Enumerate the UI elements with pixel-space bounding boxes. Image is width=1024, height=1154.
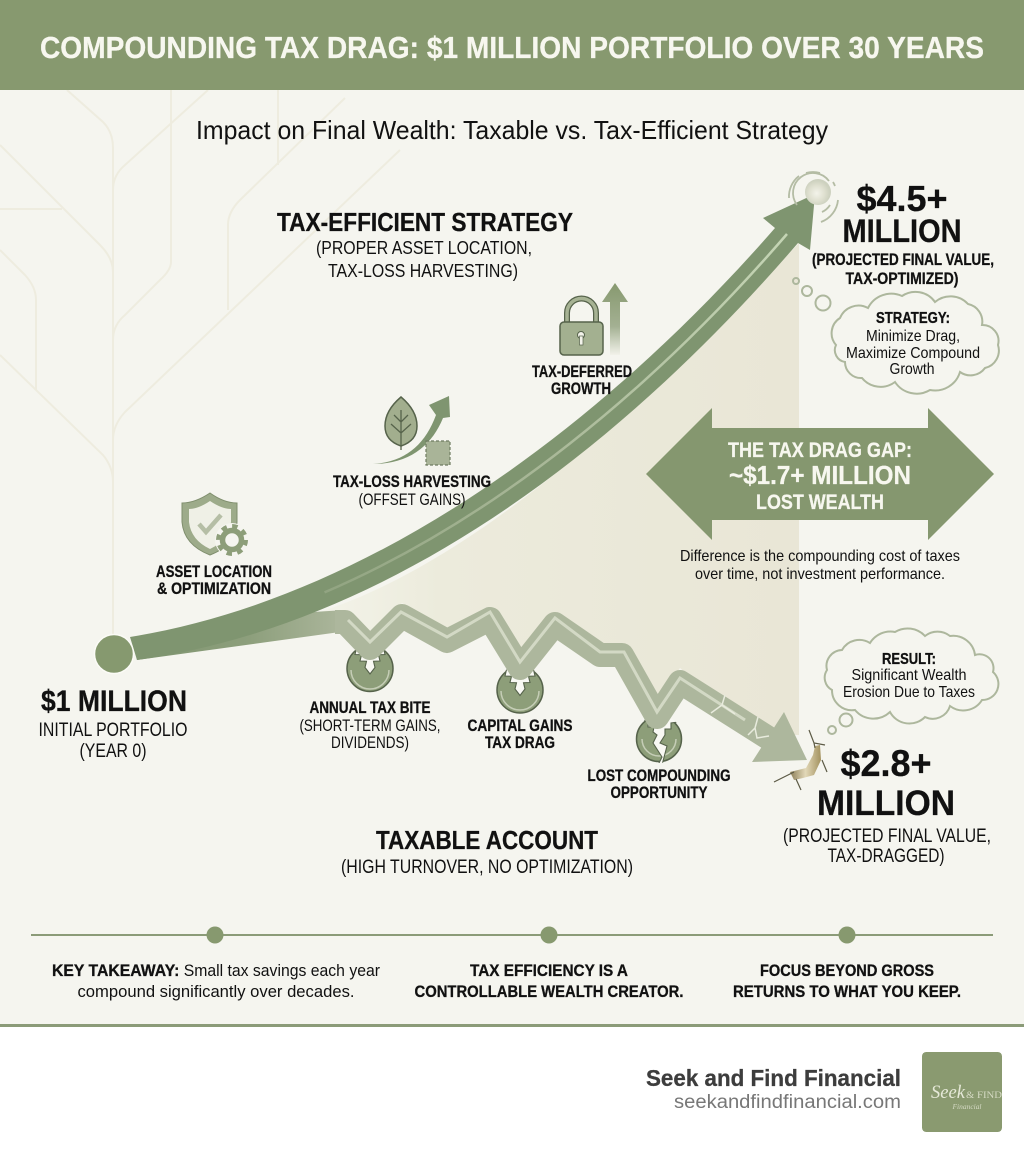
logo: Financial: [951, 1103, 982, 1111]
callout: strategy thought cloud: [793, 278, 999, 394]
icon: lock with up arrow: [560, 283, 628, 355]
final value: tax-dragged: [783, 743, 991, 867]
icon: broken coin: [636, 720, 682, 763]
takeaway 2: [414, 962, 684, 1001]
callout: result thought cloud: Erosion Due to Taxes: [843, 684, 975, 701]
header banner: [0, 0, 1024, 90]
icon: annual tax bite: [346, 650, 394, 692]
strategy heading: (PROPER ASSET LOCATION,: [316, 238, 532, 258]
logo: Seek: [931, 1082, 966, 1103]
starting value: $1 MILLION: [41, 685, 187, 718]
gap explanation: [680, 548, 960, 583]
taxable account heading: [341, 825, 633, 878]
gap explanation: Difference is the compounding cost of taxes: [680, 548, 960, 565]
label: asset location: ASSET LOCATION: [156, 563, 272, 581]
starting value: [38, 685, 188, 762]
icon: leaf with arrow and dashed square: [373, 396, 450, 465]
callout: strategy thought cloud: Maximize Compound: [846, 345, 980, 362]
double arrow: tax drag gap: LOST WEALTH: [756, 491, 884, 514]
icon: target glow at arrow tip: [789, 172, 838, 222]
strategy heading: TAX-LOSS HARVESTING): [328, 261, 518, 281]
strategy heading: [277, 207, 573, 281]
label: lost compounding: OPPORTUNITY: [610, 784, 708, 802]
starting value: (YEAR 0): [80, 741, 146, 762]
label: annual tax bite: [300, 699, 440, 752]
final value: tax-optimized: $4.5+: [856, 178, 948, 219]
final value: tax-optimized: TAX-OPTIMIZED): [846, 269, 958, 288]
label: capital gains: TAX DRAG: [485, 734, 555, 752]
taxable account heading: TAXABLE ACCOUNT: [376, 825, 598, 855]
double arrow: tax drag gap: THE TAX DRAG GAP:: [728, 439, 912, 462]
final value: tax-optimized: [812, 178, 994, 288]
label: tax-deferred growth: GROWTH: [551, 380, 611, 398]
label: tax-loss harvesting: [333, 473, 491, 509]
takeaway 1: compound significantly over decades.: [78, 983, 354, 1001]
gap explanation: over time, not investment performance.: [695, 566, 945, 583]
label: capital gains: CAPITAL GAINS: [468, 717, 572, 735]
takeaway 3: FOCUS BEYOND GROSS: [760, 962, 934, 980]
logo: [922, 1052, 1003, 1132]
footer: [0, 1024, 1024, 1154]
timeline divider: [31, 926, 993, 944]
double arrow: tax drag gap: ~$1.7+ MILLION: [729, 462, 911, 490]
callout: strategy thought cloud: STRATEGY:: [876, 310, 950, 327]
label: lost compounding: LOST COMPOUNDING: [588, 767, 730, 785]
label: asset location: & OPTIMIZATION: [157, 580, 271, 598]
final value: tax-dragged: MILLION: [817, 783, 955, 823]
brand url: seekandfindfinancial.com: [674, 1092, 901, 1113]
strategy heading: TAX-EFFICIENT STRATEGY: [277, 207, 573, 237]
tax drag gap shaded area: [320, 243, 799, 735]
takeaway 1: KEY TAKEAWAY: Small tax savings each year: [52, 962, 380, 980]
callout: strategy thought cloud: Minimize Drag,: [866, 328, 960, 345]
brand name: Seek and Find Financial: [646, 1065, 901, 1091]
label: tax-deferred growth: [532, 363, 632, 398]
callout: result thought cloud: [825, 628, 998, 734]
taxable account heading: (HIGH TURNOVER, NO OPTIMIZATION): [341, 857, 633, 878]
takeaway 1: [52, 962, 380, 1001]
label: tax-loss harvesting: (OFFSET GAINS): [358, 491, 466, 509]
takeaway 2: CONTROLLABLE WEALTH CREATOR.: [414, 983, 684, 1001]
label: lost compounding: [588, 767, 730, 802]
start point marker: [94, 634, 134, 674]
subtitle: Impact on Final Wealth: Taxable vs. Tax-Efficient Strategy: [196, 115, 828, 145]
final value: tax-dragged: TAX-DRAGGED): [828, 845, 944, 867]
final value: tax-dragged: $2.8+: [840, 743, 932, 784]
callout: strategy thought cloud: Growth: [890, 361, 934, 378]
tax-efficient strategy rising arrow: [130, 194, 815, 660]
logo: & FIND: [966, 1090, 1003, 1100]
takeaway 2: TAX EFFICIENCY IS A: [470, 962, 628, 980]
final value: tax-optimized: MILLION: [842, 213, 962, 249]
double arrow: tax drag gap: [646, 408, 994, 540]
label: asset location: [156, 563, 272, 598]
callout: result thought cloud: RESULT:: [882, 651, 936, 668]
label: annual tax bite: (SHORT-TERM GAINS,: [300, 717, 440, 735]
label: capital gains: [468, 717, 572, 752]
starting value: INITIAL PORTFOLIO: [38, 720, 188, 741]
label: tax-loss harvesting: TAX-LOSS HARVESTING: [333, 473, 491, 491]
takeaway 3: RETURNS TO WHAT YOU KEEP.: [733, 983, 961, 1001]
icon: shield with gear: [182, 493, 249, 557]
label: annual tax bite: DIVIDENDS): [331, 734, 409, 752]
takeaway 3: [733, 962, 961, 1001]
label: annual tax bite: ANNUAL TAX BITE: [310, 699, 430, 717]
icon: ground crack: [774, 730, 827, 790]
callout: result thought cloud: Significant Wealth: [852, 667, 966, 684]
icon: capital gains bite: [496, 670, 544, 714]
label: tax-deferred growth: TAX-DEFERRED: [532, 363, 632, 381]
taxable account declining line: [133, 610, 807, 762]
